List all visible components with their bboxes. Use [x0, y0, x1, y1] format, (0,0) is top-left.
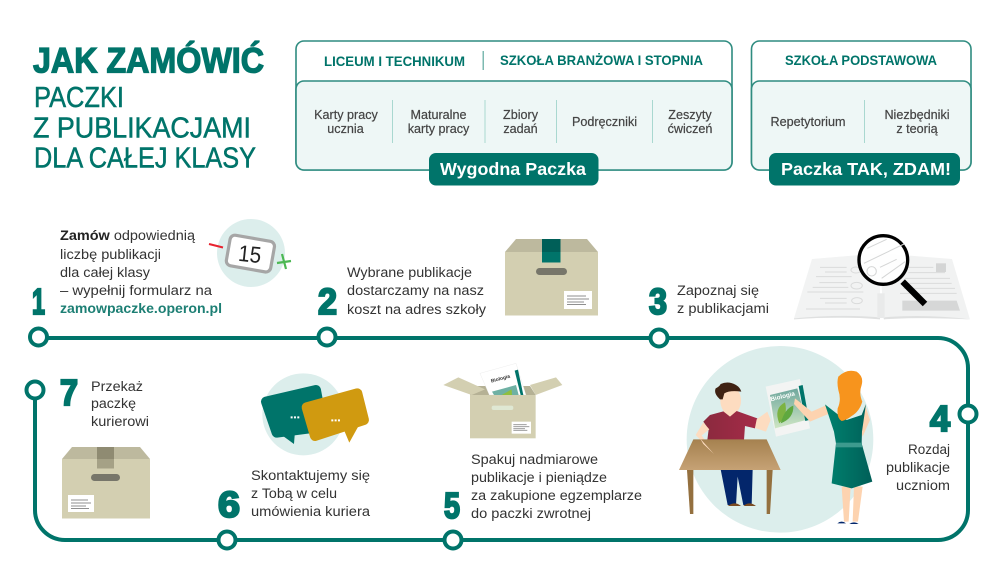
background circle: [687, 346, 873, 533]
step 1 text: – wypełnij formularz na: [60, 283, 212, 299]
icon: open book with magnifier: [794, 236, 970, 319]
title: PACZKI: [34, 82, 124, 114]
title: [33, 40, 264, 174]
item: niezbędniki z teorią: Niezbędniki: [884, 108, 950, 122]
icon: open parcel with book: Biologia: [490, 374, 511, 385]
step 4 text: [886, 442, 950, 494]
heading: szkoła podstawowa: SZKOŁA PODSTAWOWA: [785, 53, 937, 68]
step 1 text: [60, 228, 222, 317]
woman: [794, 371, 872, 524]
step 7 text: [91, 379, 149, 430]
icon: speech bubbles: [262, 373, 364, 455]
panel: liceum, technikum, szkoła branżowa: [296, 41, 732, 186]
step 2 text: Wybrane publikacje: [347, 265, 472, 281]
item: podręczniki: Podręczniki: [572, 115, 637, 129]
step 4 text: Rozdaj: [908, 442, 950, 458]
heading: szkoła branżowa: SZKOŁA BRANŻOWA I STOPNIA: [500, 53, 703, 68]
item: zeszyty ćwiczeń: ćwiczeń: [668, 122, 712, 136]
step 4 number: 4: [930, 398, 950, 439]
item: maturalne karty pracy: karty pracy: [408, 122, 470, 136]
step 1 number: 1: [32, 281, 45, 322]
step 1 text: zamowpaczke.operon.pl: [60, 301, 222, 317]
step 6 text: umówienia kuriera: [251, 504, 370, 520]
step 3 text: Zapoznaj się: [677, 283, 759, 299]
item: maturalne karty pracy: Maturalne: [410, 108, 467, 122]
step 3 text: z publikacjami: [677, 301, 769, 317]
icon: closed parcel with green tape: [505, 239, 598, 316]
table: [679, 438, 781, 514]
item: repetytorium: Repetytorium: [771, 115, 845, 129]
book: biologia: [766, 379, 810, 437]
step 5 text: do paczki zwrotnej: [471, 506, 591, 522]
step 1 text: liczbę publikacji: [60, 247, 161, 263]
heading: liceum i technikum: LICEUM I TECHNIKUM: [324, 54, 465, 69]
icon: quantity counter: [209, 219, 291, 287]
step 7 text: Przekaż: [91, 379, 143, 395]
step 1 text: Zamów odpowiednią: [60, 228, 195, 244]
icon: quantity counter: 15: [237, 240, 263, 268]
title: Z PUBLIKACJAMI: [33, 112, 251, 144]
title: JAK ZAMÓWIĆ: [33, 40, 264, 80]
icon: closed parcel with tan tape: [62, 447, 150, 518]
item: zbiory zadań: zadań: [503, 122, 538, 136]
panel: szkoła podstawowa: [752, 41, 971, 186]
step 2 text: dostarczamy na nasz: [347, 283, 484, 299]
badge: wygodna paczka: Wygodna Paczka: [440, 159, 586, 179]
item: zeszyty ćwiczeń: Zeszyty: [668, 108, 712, 122]
item: zbiory zadań: Zbiory: [503, 108, 538, 122]
step 4 text: uczniom: [896, 478, 950, 494]
man: [696, 383, 771, 506]
step 6 number: 6: [218, 484, 240, 525]
step 6 text: [251, 468, 370, 520]
step 6 text: z Tobą w celu: [251, 486, 337, 502]
step 7 text: kurierowi: [91, 414, 149, 430]
illustration: teacher handing out books: [679, 346, 873, 533]
step 7 text: paczkę: [91, 396, 136, 412]
badge: wygodna paczka: [429, 153, 598, 186]
step 5 text: publikacje i pieniądze: [471, 470, 607, 486]
step 3 text: [677, 283, 769, 317]
title: DLA CAŁEJ KLASY: [34, 142, 256, 174]
step 5 number: 5: [444, 485, 460, 526]
badge: paczka tak, zdam: [769, 153, 960, 186]
item: niezbędniki z teorią: z teorią: [896, 122, 938, 136]
item: karty pracy ucznia: Karty pracy: [314, 108, 378, 122]
step 5 text: za zakupione egzemplarze: [471, 488, 642, 504]
step 5 text: Spakuj nadmiarowe: [471, 452, 598, 468]
item: karty pracy ucznia: ucznia: [327, 122, 364, 136]
step 5 text: [471, 452, 642, 522]
process timeline: [26, 328, 976, 548]
step 6 text: Skontaktujemy się: [251, 468, 370, 484]
step 2 text: [347, 265, 487, 318]
badge: paczka tak, zdam: Paczka TAK, ZDAM!: [781, 159, 951, 179]
step 2 number: 2: [318, 281, 337, 322]
step 1 text: dla całej klasy: [60, 265, 151, 281]
step 7 number: 7: [60, 372, 78, 413]
book: biologia: Biologia: [770, 390, 796, 403]
icon: open parcel with book: [443, 363, 562, 438]
step 2 text: koszt na adres szkoły: [347, 302, 487, 318]
step 3 number: 3: [649, 281, 667, 322]
step 4 text: publikacje: [886, 460, 950, 476]
